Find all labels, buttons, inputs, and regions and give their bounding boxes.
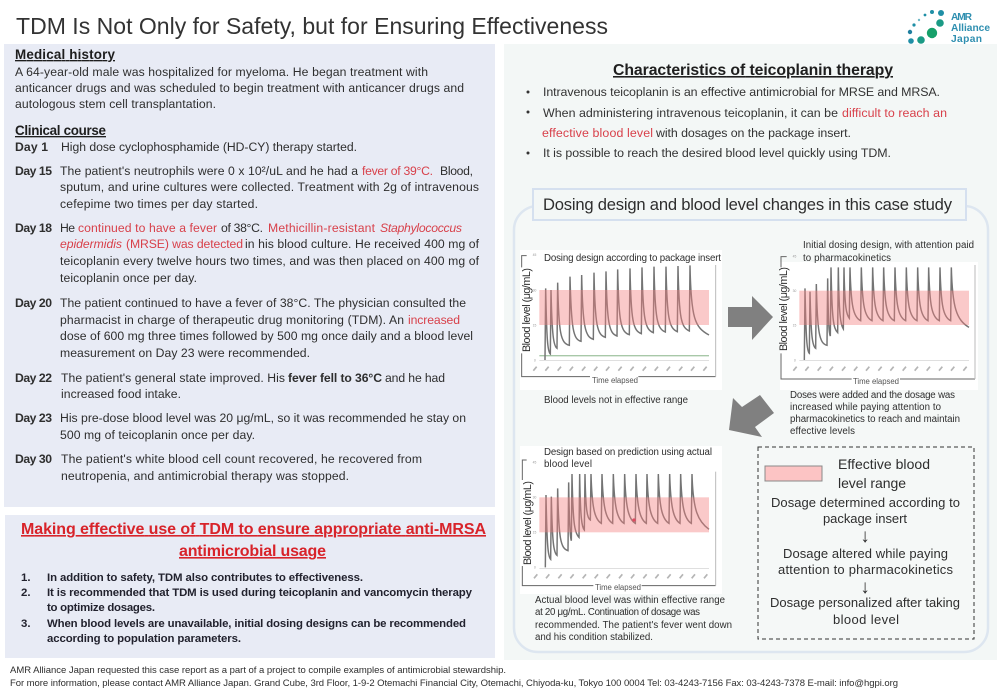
chart 3: prediction design: 15 bbox=[533, 531, 537, 535]
logo: AMR Alliance Japan bbox=[908, 10, 990, 45]
day 30: Day 30 bbox=[15, 452, 52, 466]
chart 3: prediction design: 30 bbox=[533, 496, 537, 500]
heading: medical history: Medical history bbox=[15, 47, 116, 62]
panel: case history bbox=[4, 44, 495, 507]
chart 2: pharmacokinetics design: Blood level (μg/mL) bbox=[778, 267, 790, 351]
day 18: Methicillin-resistant bbox=[268, 221, 376, 235]
chart 2: pharmacokinetics design: 30 bbox=[793, 289, 797, 293]
chart 1: package insert: 15 bbox=[533, 323, 537, 327]
day 20: dose of 600 mg three times followed by 500 mg once daily and a blood level bbox=[60, 329, 473, 343]
legend text: Dosage personalized after taking bbox=[770, 595, 960, 610]
chart 3: prediction design: 0 bbox=[534, 566, 536, 570]
chart 3: prediction design: Time elapsed bbox=[595, 583, 641, 592]
panel: teicoplanin and dosing design bbox=[504, 44, 997, 660]
chart 1: package insert: 30 bbox=[533, 288, 537, 292]
day 18: He bbox=[60, 221, 75, 235]
chart 1: package insert: Blood level (μg/mL) bbox=[521, 268, 533, 352]
panel: making effective use of TDM bbox=[5, 515, 495, 658]
legend swatch bbox=[765, 466, 822, 481]
day 18: teicoplanin every twelve hours two times, and was then placed on 400 mg of bbox=[60, 254, 480, 268]
day 18: in his blood culture. He received 400 mg of bbox=[245, 237, 480, 251]
footer text bbox=[10, 665, 898, 689]
heading: making effective use: Making effective use of TDM to ensure appropriate anti-MRSA bbox=[21, 521, 486, 538]
day 23: 500 mg of teicoplanin once per day. bbox=[60, 428, 255, 442]
day 30: The patient's white blood cell count recovered, he recovered from bbox=[61, 452, 422, 466]
legend text: Effective blood bbox=[838, 456, 930, 472]
caption: chart 2: Doses were added and the dosage was bbox=[790, 390, 955, 401]
heading box: dosing design bbox=[533, 189, 966, 220]
arrow: right bbox=[728, 296, 773, 340]
heading: making effective use bbox=[21, 521, 486, 560]
day 23: Day 23 bbox=[15, 411, 52, 425]
caption: chart 2: pharmacokinetics to reach and maintain bbox=[790, 414, 960, 425]
day 1: Day 1 bbox=[15, 140, 48, 154]
day 22: and he had bbox=[385, 371, 445, 385]
legend text: Dosage altered while paying bbox=[783, 546, 948, 561]
day 30: neutropenia, and antimicrobial therapy was stopped. bbox=[61, 469, 349, 483]
day 30 bbox=[15, 452, 422, 483]
day 18: epidermidis bbox=[60, 237, 122, 251]
day 20: increased bbox=[408, 313, 460, 327]
day 22: The patient's general state improved. His bbox=[61, 371, 285, 385]
heading box: dosing design: Dosing design and blood level changes in this case study bbox=[543, 195, 953, 214]
chart 3: prediction design: Design based on prediction using actual bbox=[544, 447, 712, 458]
day 23 bbox=[15, 411, 466, 442]
bullet list: effective blood level bbox=[542, 126, 653, 140]
text block: medical history bbox=[15, 65, 464, 111]
numbered list: When blood levels are unavailable, initial dosing designs can be recommended bbox=[47, 618, 466, 630]
day 15: cefepime two times per day started. bbox=[60, 197, 258, 211]
chart 1: package insert: 45 bbox=[533, 253, 537, 257]
legend text: attention to pharmacokinetics bbox=[778, 562, 954, 577]
day 18: of 38°C. bbox=[221, 221, 263, 235]
day 20: measurement on Day 23 were recommended. bbox=[60, 346, 310, 360]
text block: medical history: autologous stem cell transplantation. bbox=[15, 97, 216, 111]
chart 2: pharmacokinetics design: to pharmacokinetics bbox=[803, 253, 891, 264]
day 15: The patient's neutrophils were 0 x 10²/uL and he had a bbox=[60, 164, 358, 178]
bullet list: difficult to reach an bbox=[842, 106, 947, 120]
chart 2: pharmacokinetics design: Time elapsed bbox=[853, 377, 899, 386]
chart 1: package insert: Time elapsed bbox=[592, 376, 638, 385]
numbered list: 2. bbox=[21, 587, 30, 599]
logo: AMR Alliance Japan: Japan bbox=[951, 34, 982, 45]
day 1: High dose cyclophosphamide (HD-CY) therapy started. bbox=[61, 140, 357, 154]
chart 2: pharmacokinetics design: 45 bbox=[793, 254, 797, 258]
chart 3: prediction design: blood level bbox=[544, 459, 592, 470]
day 20: Day 20 bbox=[15, 296, 52, 310]
caption: chart 3: recommended. The patient's fever went down bbox=[535, 620, 732, 631]
day 15: Blood, bbox=[440, 164, 473, 178]
caption: chart 1: Blood levels not in effective range bbox=[544, 395, 688, 406]
day 23: His pre-dose blood level was 20 μg/mL, so it was recommended he stay on bbox=[60, 411, 466, 425]
logo: AMR Alliance Japan: Alliance bbox=[951, 23, 990, 34]
legend text: ↓ bbox=[860, 577, 870, 598]
legend text: level range bbox=[838, 475, 906, 491]
day 18: continued to have a fever bbox=[78, 221, 217, 235]
caption: chart 2 bbox=[790, 390, 960, 437]
bullet list: Intravenous teicoplanin is an effective antimicrobial for MRSE and MRSA. bbox=[543, 85, 940, 99]
bullet list: It is possible to reach the desired blood level quickly using TDM. bbox=[543, 146, 891, 160]
caption: chart 3: Actual blood level was within effective range bbox=[535, 595, 725, 606]
text block: medical history: A 64-year-old male was hospitalized for myeloma. He began treatment with bbox=[15, 65, 428, 79]
legend bbox=[758, 447, 974, 639]
heading: making effective use: antimicrobial usage bbox=[179, 543, 326, 560]
caption: chart 3: at 20 μg/mL. Continuation of dosage was bbox=[535, 607, 700, 618]
text block: medical history: anticancer drugs and was scheduled to begin treatment with anticancer drugs and bbox=[15, 81, 464, 95]
arrow: down-left bbox=[729, 395, 774, 437]
title: TDM Is Not Only for Safety, but for Ensuring Effectiveness bbox=[16, 13, 608, 39]
numbered list: It is recommended that TDM is used during teicoplanin and vancomycin therapy bbox=[47, 587, 473, 599]
day 20 bbox=[15, 296, 473, 360]
chart 2: pharmacokinetics design: 0 bbox=[794, 358, 796, 362]
chart 2: pharmacokinetics design: Initial dosing design, with attention paid bbox=[803, 240, 974, 251]
day 15 bbox=[15, 164, 479, 211]
numbered list: according to population parameters. bbox=[47, 633, 241, 645]
heading: characteristics of teicoplanin therapy: Characteristics of teicoplanin therapy bbox=[613, 62, 893, 79]
caption: chart 2: effective levels bbox=[790, 426, 855, 437]
caption: chart 2: increased while paying attention to bbox=[790, 402, 941, 413]
caption: chart 3: and his condition stabilized. bbox=[535, 632, 653, 643]
bullet list bbox=[526, 85, 947, 160]
legend text bbox=[770, 456, 960, 627]
day 20: The patient continued to have a fever of 38°C. The physician consulted the bbox=[60, 296, 466, 310]
legend text: Dosage determined according to bbox=[771, 495, 960, 510]
day 18: (MRSE) was detected bbox=[126, 237, 243, 251]
day 18 bbox=[15, 221, 480, 285]
numbered list: 1. bbox=[21, 572, 30, 584]
day 18: Staphylococcus bbox=[380, 221, 462, 235]
footer text: For more information, please contact AMR Alliance Japan. Grand Cube, 3rd Floor, 1-9-2 Otemachi Financial City, Otemachi, Chiyoda-ku, Tokyo 100 0004 Tel: 03-4243-7156 Fax: 03-4243-7378 E-mail: info@hgpi.org bbox=[10, 678, 898, 689]
chart 3: prediction design bbox=[520, 446, 722, 594]
chart 2: pharmacokinetics design bbox=[778, 240, 978, 390]
day 22: fever fell to 36°C bbox=[288, 371, 382, 385]
bullet list: with dosages on the package insert. bbox=[655, 126, 851, 140]
day 22: Day 22 bbox=[15, 371, 52, 385]
heading: clinical course: Clinical course bbox=[15, 123, 106, 138]
chart 1: package insert: Dosing design according to package insert bbox=[544, 253, 721, 264]
rounded frame bbox=[514, 206, 988, 652]
footer text: AMR Alliance Japan requested this case report as a part of a project to compile examples of antimicrobial stewardship. bbox=[10, 665, 506, 676]
day 22: increased food intake. bbox=[61, 387, 181, 401]
day 22 bbox=[15, 371, 445, 401]
chart 1: package insert: 0 bbox=[534, 358, 536, 362]
numbered list: to optimize dosages. bbox=[47, 602, 155, 614]
chart 1: package insert bbox=[520, 250, 722, 390]
day 15: sputum, and urine cultures were collected. Treatment with 2g of intravenous bbox=[60, 180, 479, 194]
bullet list: When administering intravenous teicoplanin, it can be bbox=[543, 106, 838, 120]
numbered list: In addition to safety, TDM also contributes to effectiveness. bbox=[47, 572, 363, 584]
logo: AMR Alliance Japan: AMR bbox=[951, 12, 973, 23]
legend text: ↓ bbox=[860, 526, 870, 547]
day 18: Day 18 bbox=[15, 221, 52, 235]
legend text: package insert bbox=[823, 511, 907, 526]
numbered list: 3. bbox=[21, 618, 30, 630]
numbered list bbox=[21, 572, 473, 645]
legend text: blood level bbox=[833, 612, 899, 627]
chart 3: prediction design: Blood level (μg/mL) bbox=[522, 481, 534, 565]
chart 3: prediction design: 45 bbox=[533, 461, 537, 465]
caption: chart 3 bbox=[535, 595, 732, 643]
day 15: Day 15 bbox=[15, 164, 52, 178]
chart 2: pharmacokinetics design: 15 bbox=[793, 323, 797, 327]
day 15: fever of 39°C. bbox=[362, 164, 433, 178]
day 18: teicoplanin once per day. bbox=[60, 271, 197, 285]
day 20: pharmacist in charge of therapeutic drug monitoring (TDM). An bbox=[60, 313, 404, 327]
